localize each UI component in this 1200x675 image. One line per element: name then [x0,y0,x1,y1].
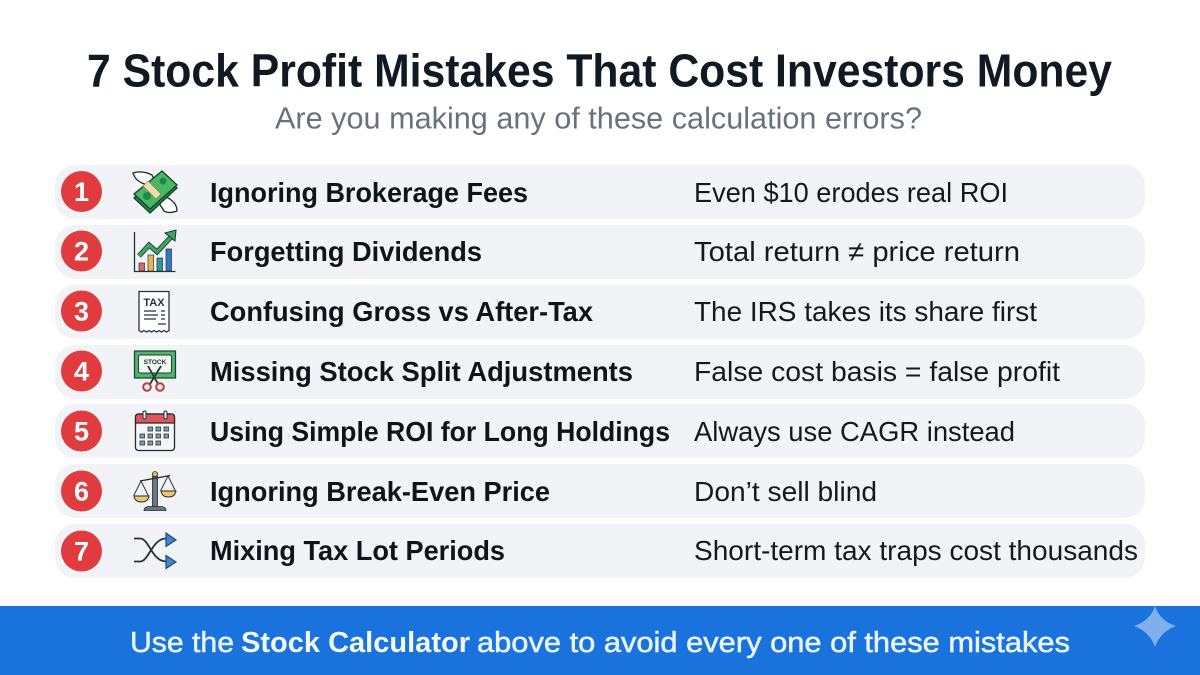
mistake heading 3: Confusing Gross vs After-Tax [210,296,593,327]
mistake heading 5: Using Simple ROI for Long Holdings [210,416,670,447]
mistake heading 2: Forgetting Dividends [210,236,482,267]
icon: sparkle [1134,606,1176,647]
icon: calendar [136,411,174,450]
mistake note 6: Don’t sell blind [694,476,877,507]
icon: stock certificate and scissors [134,351,176,391]
footer call to action: Stock Calculator [241,627,470,659]
number badge 5: 5 [74,416,89,446]
number badge 2: 2 [74,236,89,266]
row 2: dividends [55,225,1145,279]
row 7: tax lots [55,524,1145,578]
footer call to action: above to avoid every one of these mistakes [477,627,1070,659]
mistake heading 6: Ignoring Break-Even Price [210,476,550,507]
footer call to action [130,627,1070,659]
icon: tax receipt [139,292,169,332]
row 4: stock split [55,345,1145,399]
number badge 4 [61,350,102,392]
row 5: simple ROI [55,404,1145,458]
number badge 4: 4 [74,356,89,386]
number badge 7 [61,530,102,572]
mistake note 2: Total return ≠ price return [694,236,1020,267]
number badge 7: 7 [74,536,89,566]
number badge 6 [61,470,102,512]
number badge 2 [61,230,102,272]
row 6: break-even [55,464,1145,518]
number badge 3 [61,290,102,332]
footer banner [0,606,1200,675]
icon: shuffle arrows [134,533,176,568]
mistake heading 7: Mixing Tax Lot Periods [210,535,505,566]
number badge 5 [61,410,102,452]
row 1: brokerage fees [55,165,1145,219]
icon: stock certificate and scissors: STOCK [144,359,167,366]
row 3: after-tax [55,285,1145,339]
mistake note 3: The IRS takes its share first [694,296,1037,327]
mistake note 4: False cost basis = false profit [694,356,1060,387]
icon: tax receipt: TAX [143,297,165,309]
number badge 1: 1 [74,177,89,207]
icon: balance scale [134,472,176,510]
number badge 6: 6 [74,476,89,506]
number badge 3: 3 [74,296,89,326]
number badge 1 [61,171,102,212]
subtitle: Are you making any of these calculation errors? [275,100,922,136]
mistake note 1: Even $10 erodes real ROI [694,177,1008,208]
mistake heading 1: Ignoring Brokerage Fees [210,177,528,208]
mistake note 7: Short-term tax traps cost thousands [694,535,1138,566]
footer call to action: Use the [130,627,234,659]
icon: flying money [133,171,177,213]
mistake heading 4: Missing Stock Split Adjustments [210,356,633,387]
mistake note 5: Always use CAGR instead [694,416,1015,447]
title: 7 Stock Profit Mistakes That Cost Investors Money [87,44,1112,96]
icon: growth bar chart [134,230,176,272]
